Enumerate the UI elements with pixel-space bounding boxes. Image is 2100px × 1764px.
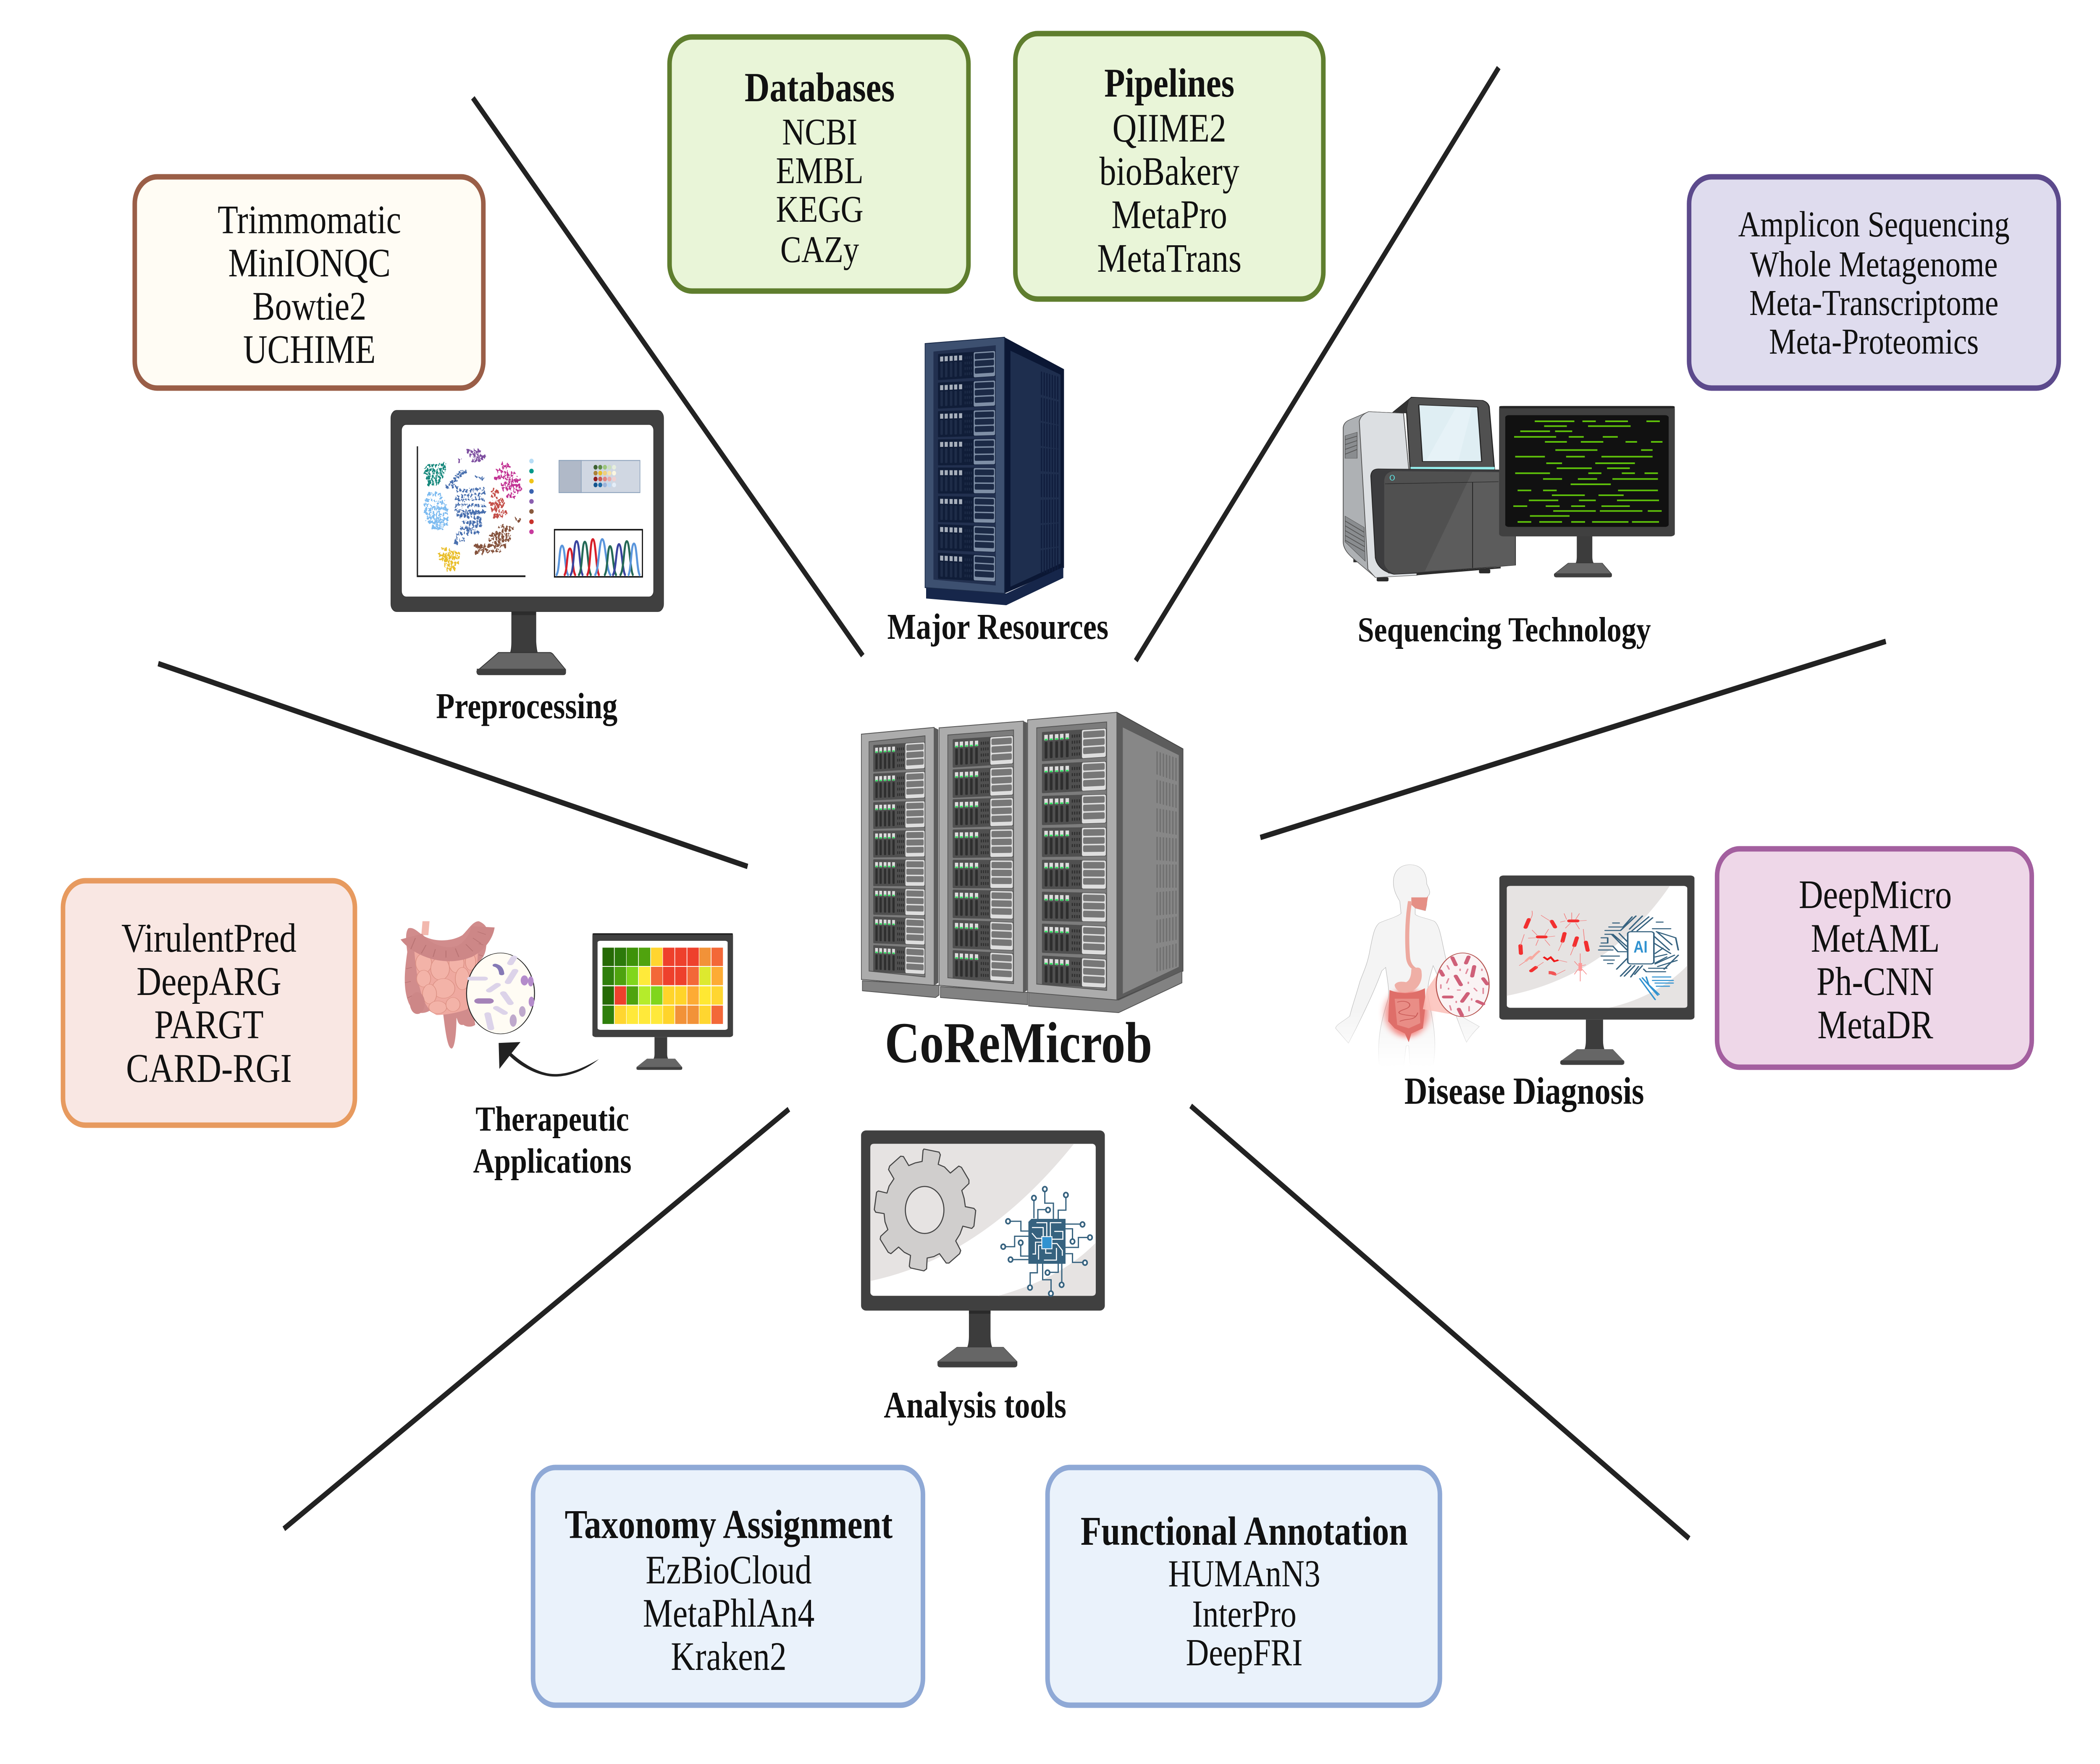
left tower [861,727,939,998]
method list: Meta-Proteomics [1769,322,1979,362]
rack base [926,567,1063,605]
stomach [1395,968,1422,992]
label: Analysis tools: Analysis tools [884,1384,1066,1426]
gear [874,1149,976,1271]
sequencing monitor [1499,406,1675,577]
functional heading: Functional Annotation [1081,1509,1408,1554]
method list: Amplicon Sequencing [1738,205,2010,245]
AI circuit brain [1599,916,1678,977]
chromatogram [554,530,643,577]
databases heading: Databases [745,64,895,110]
icon: CoReMicrob server cluster [861,712,1183,1013]
middle tower [939,721,1028,1005]
taxonomy tool list: Kraken2 [671,1634,787,1679]
taxonomy tool list [643,1548,814,1679]
icon: preprocessing monitor [391,410,664,675]
AI chip circuit [1001,1186,1092,1296]
panel: diagnosis tools [1717,849,2032,1067]
tool list: Bowtie2 [252,284,366,329]
green sequence reads [1513,421,1662,522]
therapeutic tool list: CARD-RGI [126,1045,292,1091]
divider lines [158,68,1886,1538]
pipeline list: MetaTrans [1097,236,1242,281]
panel: databases [669,37,969,291]
pipeline list: bioBakery [1100,149,1239,194]
method list [1738,205,2010,362]
label: Sequencing Technology: Sequencing Technology [1358,610,1651,649]
scatter legend [529,459,534,534]
AI chip [1628,932,1654,964]
rack side [1005,337,1064,593]
icon: analysis tools monitor [861,1130,1105,1367]
colon [405,921,487,1049]
rack front frame [925,337,1005,593]
tool list [218,197,401,372]
heatmap monitor [592,933,733,1070]
taxonomy heading: Taxonomy Assignment [565,1502,893,1547]
tool list: Trimmomatic [218,197,401,242]
label: Preprocessing: Preprocessing [436,686,617,727]
tool list: MinIONQC [228,241,391,286]
pipeline list: MetaPro [1111,192,1227,237]
scatter plot [417,446,525,576]
diagnosis tool list [1799,872,1952,1047]
functional tool list: DeepFRI [1186,1632,1302,1674]
mouth and throat [1411,896,1428,911]
database list: KEGG [776,188,864,230]
pipeline list [1097,106,1242,281]
curved arrow [499,1042,599,1076]
tool list: UCHIME [243,327,375,372]
database list: EMBL [776,150,864,192]
panel: preprocessing tools [135,177,483,388]
method list: Whole Metagenome [1750,244,1998,285]
inflamed intestine [1386,988,1428,1042]
therapeutic tool list: PARGT [154,1002,264,1047]
diagnosis monitor [1499,875,1694,1065]
panel: sequencing methods [1689,177,2059,388]
diagnosis tool list: Ph-CNN [1816,959,1934,1004]
panel: therapeutic tools [63,881,355,1125]
label: Therapeutic Applications: Therapeutic [475,1099,629,1138]
right tower [1028,712,1183,1013]
diagnosis tool list: DeepMicro [1799,872,1952,917]
functional tool list: HUMAnN3 [1168,1553,1320,1595]
label: Therapeutic Applications: Applications [473,1141,632,1180]
functional tool list: InterPro [1192,1593,1297,1635]
microbiome magnifier [1436,953,1489,1017]
taxonomy tool list: EzBioCloud [646,1548,812,1593]
icon: navy server rack [925,337,1064,605]
pipeline list: QIIME2 [1113,106,1226,151]
red bacteria [1519,911,1588,981]
diagnosis tool list: MetAML [1811,916,1940,961]
database list: NCBI [782,111,857,153]
icon: sequencing machine [1343,397,1675,581]
rack drive units [938,350,995,582]
therapeutic tool list: VirulentPred [121,915,297,961]
method list: Meta-Transcriptome [1749,283,1998,323]
zoom cone [1423,971,1461,1016]
label: Major Resources: Major Resources [887,607,1108,647]
title: CoReMicrob: CoReMicrob [885,1011,1152,1075]
panel: pipelines [1016,34,1323,299]
therapeutic tool list: DeepARG [136,958,281,1004]
pipelines heading: Pipelines [1104,60,1234,106]
panel: taxonomy assignment [533,1467,923,1705]
human body [1336,865,1479,1067]
gut microbe magnifier [467,953,535,1034]
panel: functional annotation [1047,1467,1440,1705]
database list [776,111,864,270]
functional tool list [1168,1553,1320,1674]
icon: disease diagnosis [1336,865,1694,1067]
esophagus [1407,901,1415,969]
icon: therapeutic applications [405,921,733,1076]
microarray slide [559,460,640,493]
AI chip: AI [1633,937,1648,956]
diagnosis tool list: MetaDR [1817,1003,1933,1047]
database list: CAZy [780,228,859,270]
intestine loops [416,953,476,1013]
therapeutic tool list [121,915,297,1091]
taxonomy tool list: MetaPhlAn4 [643,1591,814,1636]
label: Disease Diagnosis: Disease Diagnosis [1404,1070,1644,1113]
heatmap [602,948,723,1024]
label: Therapeutic Applications [473,1099,632,1180]
